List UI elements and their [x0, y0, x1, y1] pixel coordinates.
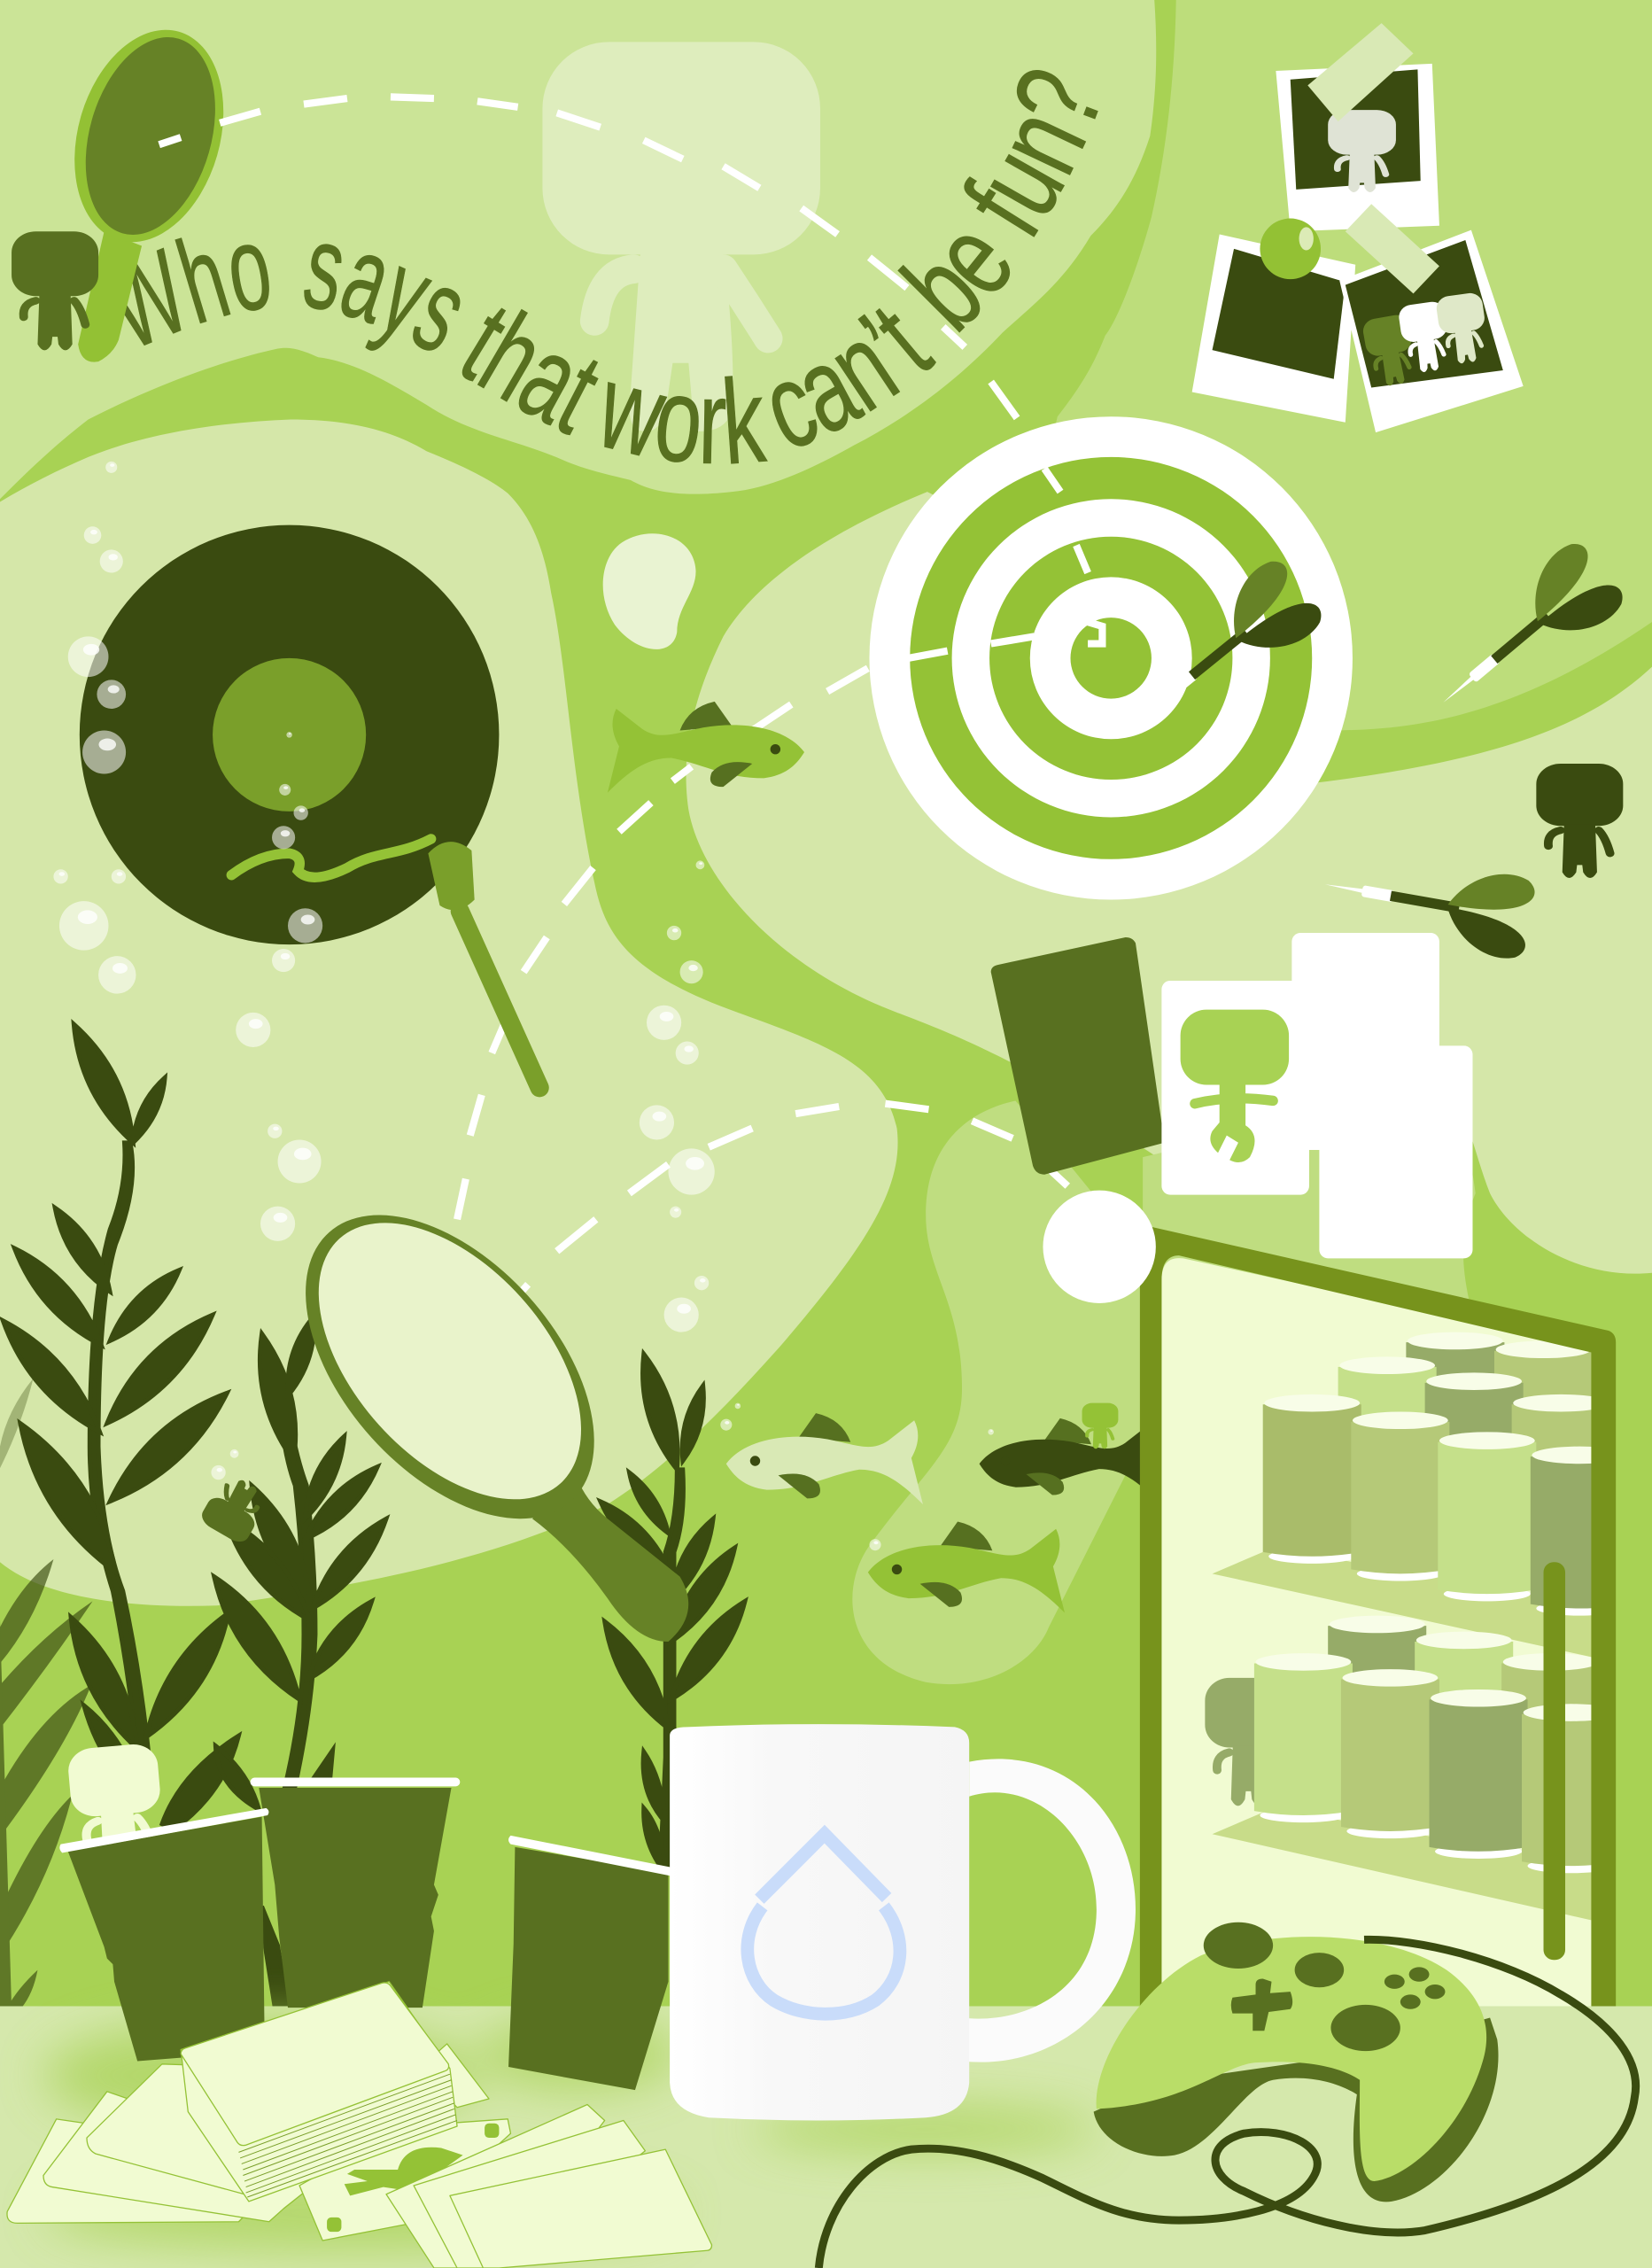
panel: top headline area — [0, 0, 1156, 499]
cup: second — [251, 1778, 460, 2008]
cards on table — [7, 1982, 711, 2268]
mug — [670, 1724, 1136, 2120]
icon: target — [869, 416, 1353, 900]
fridge — [1140, 1226, 1629, 2008]
icon: vinyl record — [80, 525, 499, 944]
character: dark figure with dart — [1536, 764, 1623, 878]
arrowhead — [452, 1345, 473, 1384]
card: dark — [991, 937, 1165, 1175]
tape — [1346, 204, 1439, 293]
arrow: dashed path second — [499, 1104, 1067, 1317]
character on white card — [1181, 1010, 1289, 1162]
controller shadow — [1094, 2018, 1499, 2202]
panel: left pale area — [0, 419, 898, 1606]
controller cable — [818, 1939, 1636, 2268]
icon: dart lower — [1318, 843, 1537, 962]
cans — [1205, 1332, 1629, 1873]
icon: dart right — [1416, 537, 1630, 734]
cup: first — [59, 1808, 268, 2062]
icon: racket — [51, 12, 247, 362]
plant: right — [601, 1354, 745, 1873]
fish: pale — [726, 1413, 923, 1504]
card — [7, 2119, 304, 2223]
shelf lower — [1213, 1808, 1594, 1921]
logo: droplet — [748, 1834, 900, 2014]
panel: light area above fridge — [1143, 1084, 1483, 1353]
table — [0, 2006, 1652, 2268]
icon: jelly bean — [603, 533, 696, 649]
panel: top-right light area — [1012, 0, 1652, 730]
game controller — [1094, 1922, 1499, 2202]
buttons — [1231, 1953, 1445, 2051]
icon: dart in target — [1113, 555, 1328, 750]
fridge handle — [1544, 1562, 1565, 1960]
cards: white — [1161, 933, 1472, 1258]
photo: left polaroid — [1192, 234, 1355, 423]
character: figure in plant — [198, 1471, 272, 1546]
fridge frame — [1140, 1226, 1616, 2008]
plants: left translucent — [0, 1379, 93, 2008]
fish: dark — [980, 1418, 1157, 1500]
pin — [1260, 219, 1321, 279]
character: small figure on fish — [1082, 1403, 1118, 1449]
white circle node — [1043, 1191, 1156, 1303]
title: Who says that work can’t be fun? — [124, 70, 1098, 464]
bumper — [1204, 1922, 1273, 1969]
cup: third — [508, 1836, 671, 2090]
panel: right pale area — [686, 492, 1652, 1274]
table shadows — [43, 2018, 1099, 2250]
ghost figure — [542, 42, 820, 431]
icon: paintbrush — [231, 839, 539, 1088]
photo: right polaroid — [1339, 230, 1524, 432]
fish: top — [608, 702, 804, 793]
photo: top polaroid — [1276, 23, 1439, 231]
plant: large left — [3, 1024, 259, 1829]
panel: light blob behind fish — [852, 1100, 1157, 1684]
icon: hand mirror — [251, 1161, 688, 1642]
fridge interior — [1161, 1258, 1594, 2008]
shelf upper — [1213, 1548, 1594, 1658]
fish: green — [868, 1522, 1065, 1612]
character: dark figure at racket — [12, 231, 98, 350]
card stack — [181, 1982, 457, 2202]
plant: middle — [214, 1317, 386, 2008]
character: pale figure behind cup — [66, 1743, 167, 1876]
bubbles — [53, 462, 994, 1550]
photos — [1192, 23, 1524, 432]
controller body — [1097, 1937, 1486, 2181]
green splash on card — [327, 2124, 499, 2232]
arrow: dashed path — [159, 97, 1102, 1309]
